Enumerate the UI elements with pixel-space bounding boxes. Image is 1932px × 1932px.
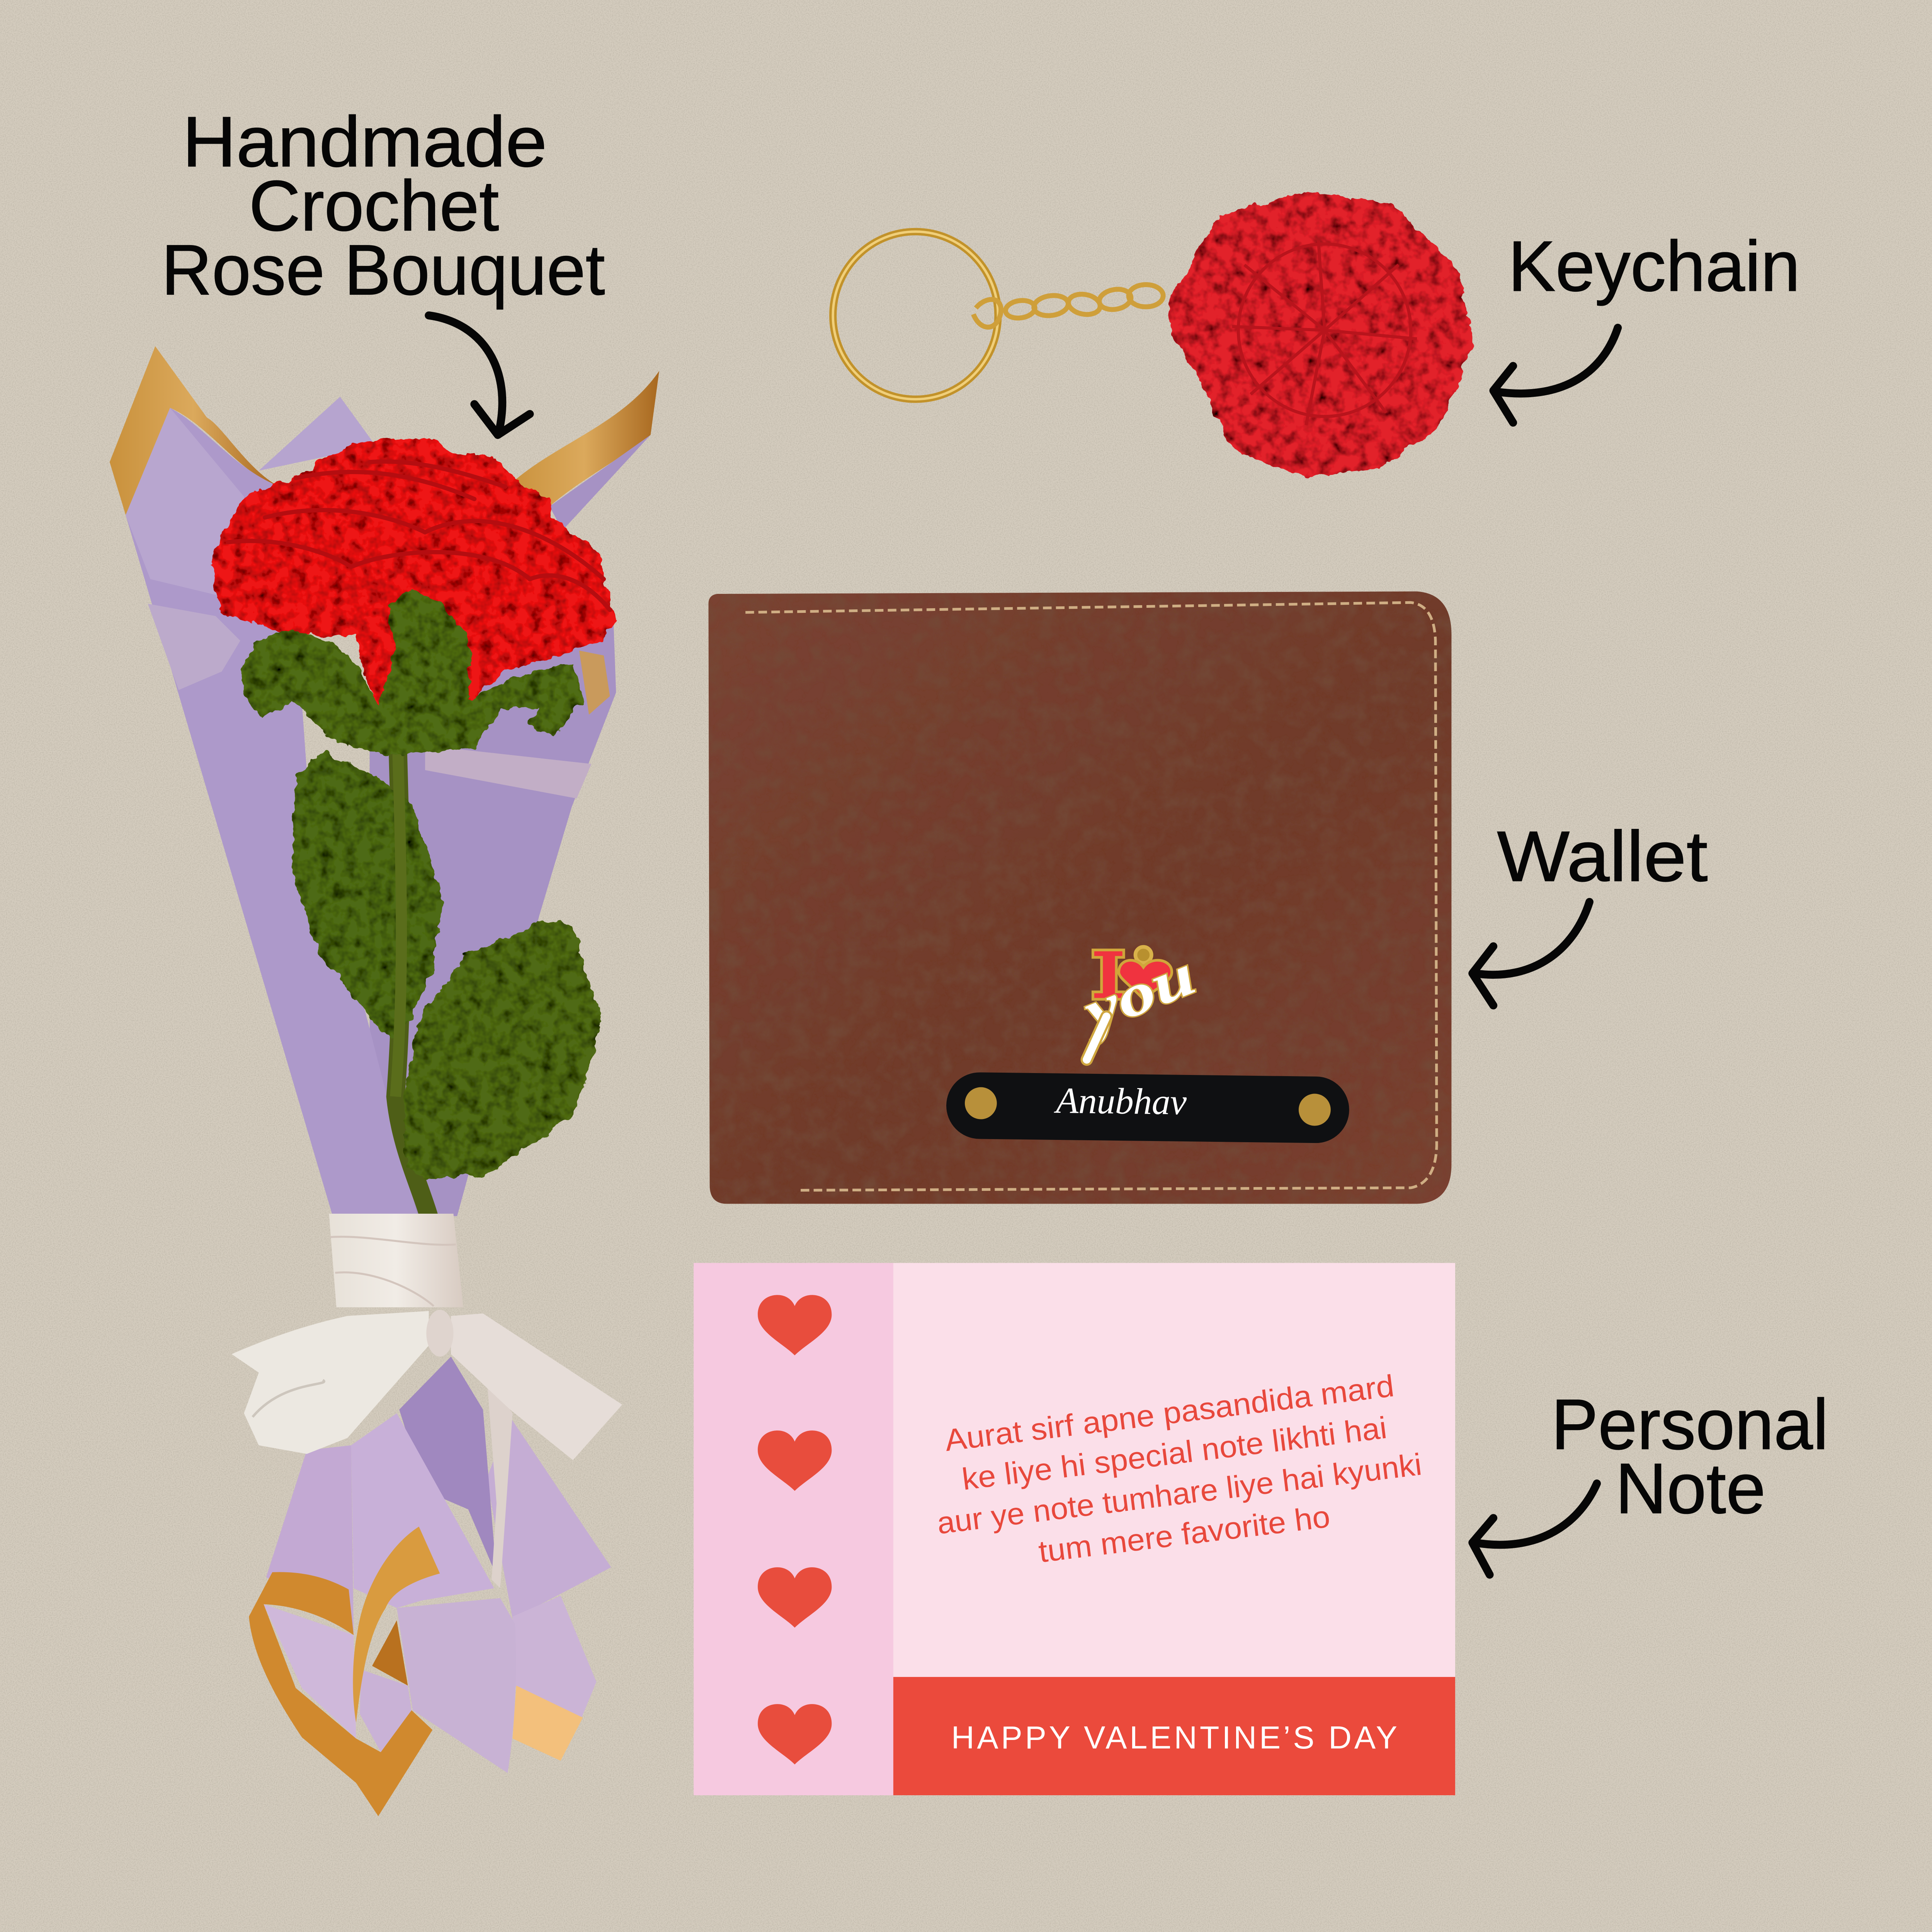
- chain: [973, 285, 1163, 327]
- ribbon: knot: [426, 1310, 453, 1357]
- card side strip: [694, 1263, 893, 1795]
- note message: Aurat sirf apne pasandida mard: [943, 1368, 1396, 1458]
- wrap: gold fragment behind rose: [187, 589, 240, 622]
- ribbon: hanging tail: [487, 1376, 513, 1588]
- wrap: mid lower panel: [351, 1413, 494, 1608]
- wrap: bottom lavender inner: [264, 1604, 356, 1738]
- name badge: [946, 1072, 1350, 1143]
- wrap: gold band right: [509, 371, 659, 507]
- label: Personal Note: Note: [1615, 1449, 1766, 1529]
- rivet right: [1298, 1094, 1331, 1126]
- rose: red blossom: [211, 437, 616, 712]
- rose: green sepals: [240, 589, 584, 757]
- panel: personal note card: [694, 1263, 1455, 1795]
- pin ring: [1135, 947, 1151, 963]
- rose: petal folds: [228, 461, 610, 610]
- ribbon: wrap: [329, 1214, 463, 1307]
- pin letter I: [1093, 950, 1124, 999]
- icon: hearts column: [758, 1295, 832, 1764]
- leaf: right: [403, 920, 602, 1180]
- keyring: [833, 231, 998, 399]
- arrow: bouquet label to rose: [429, 315, 530, 435]
- illustration: keychain: [833, 191, 1473, 478]
- stem highlight: [396, 754, 401, 1097]
- pin word you: you: [1067, 942, 1204, 1048]
- heading: Handmade Crochet Rose Bouquet: Handmade: [182, 102, 547, 182]
- arrow: personal note: [1473, 1483, 1597, 1575]
- note message: [925, 1366, 1429, 1581]
- rose: stem: [396, 754, 429, 1216]
- label: Keychain: Keychain: [1508, 227, 1800, 306]
- ribbon: bow left: [231, 1311, 429, 1454]
- arrow: keychain: [1493, 328, 1618, 423]
- crochet heart: [1168, 191, 1473, 478]
- ribbon: bow right: [451, 1313, 622, 1460]
- label: Wallet: Wallet: [1497, 817, 1708, 896]
- pin descender: [1087, 1017, 1107, 1060]
- note message: tum mere favorite ho: [1037, 1499, 1332, 1569]
- heading: Handmade Crochet Rose Bouquet: Rose Bouquet: [162, 230, 605, 310]
- card red banner: [893, 1677, 1455, 1795]
- wrap: centre front panel: [397, 1598, 516, 1773]
- heading: Handmade Crochet Rose Bouquet: Crochet: [249, 166, 499, 246]
- wrap: gold lower edge: [249, 1572, 432, 1816]
- leaf: left: [292, 752, 442, 1039]
- pin heart: [1119, 960, 1172, 999]
- wrap: gold bottom right: [513, 1685, 583, 1761]
- panel: wallet: [709, 592, 1451, 1204]
- note message: aur ye note tumhare liye hai kyunki: [935, 1447, 1423, 1541]
- wrap: right purple panel: [370, 435, 651, 1216]
- note message: ke liye hi special note likhti hai: [960, 1410, 1389, 1497]
- wrap: pale upper band right: [425, 745, 592, 798]
- wrap: gold band left: [110, 346, 277, 515]
- wrap: dark inner fold: [399, 1357, 497, 1576]
- label: Personal Note: Personal: [1551, 1385, 1828, 1464]
- banner text: HAPPY VALENTINE’S DAY: [951, 1719, 1397, 1755]
- pin: I love you: [1067, 942, 1204, 1060]
- wrap: back purple peak: [259, 397, 376, 471]
- rivet left: [964, 1087, 997, 1119]
- card main: [694, 1263, 1455, 1795]
- wrap: lower right panel: [487, 1417, 611, 1619]
- wallet body: [709, 592, 1451, 1204]
- heading: Handmade Crochet Rose Bouquet: [162, 102, 605, 310]
- wrap: left lower panel: [266, 1445, 354, 1633]
- wrap: left purple front panel: [126, 408, 418, 1216]
- wallet stitching: [745, 602, 1437, 1190]
- wrap: lower right back: [513, 1595, 596, 1718]
- wrap: gold ribbon curl: [353, 1527, 440, 1723]
- heart radial stitches: [1232, 240, 1417, 425]
- badge name: Anubhav: [1053, 1080, 1187, 1122]
- arrow: wallet: [1473, 902, 1590, 1005]
- label: Personal Note: [1551, 1385, 1828, 1529]
- illustration: crochet rose bouquet: [110, 346, 659, 1816]
